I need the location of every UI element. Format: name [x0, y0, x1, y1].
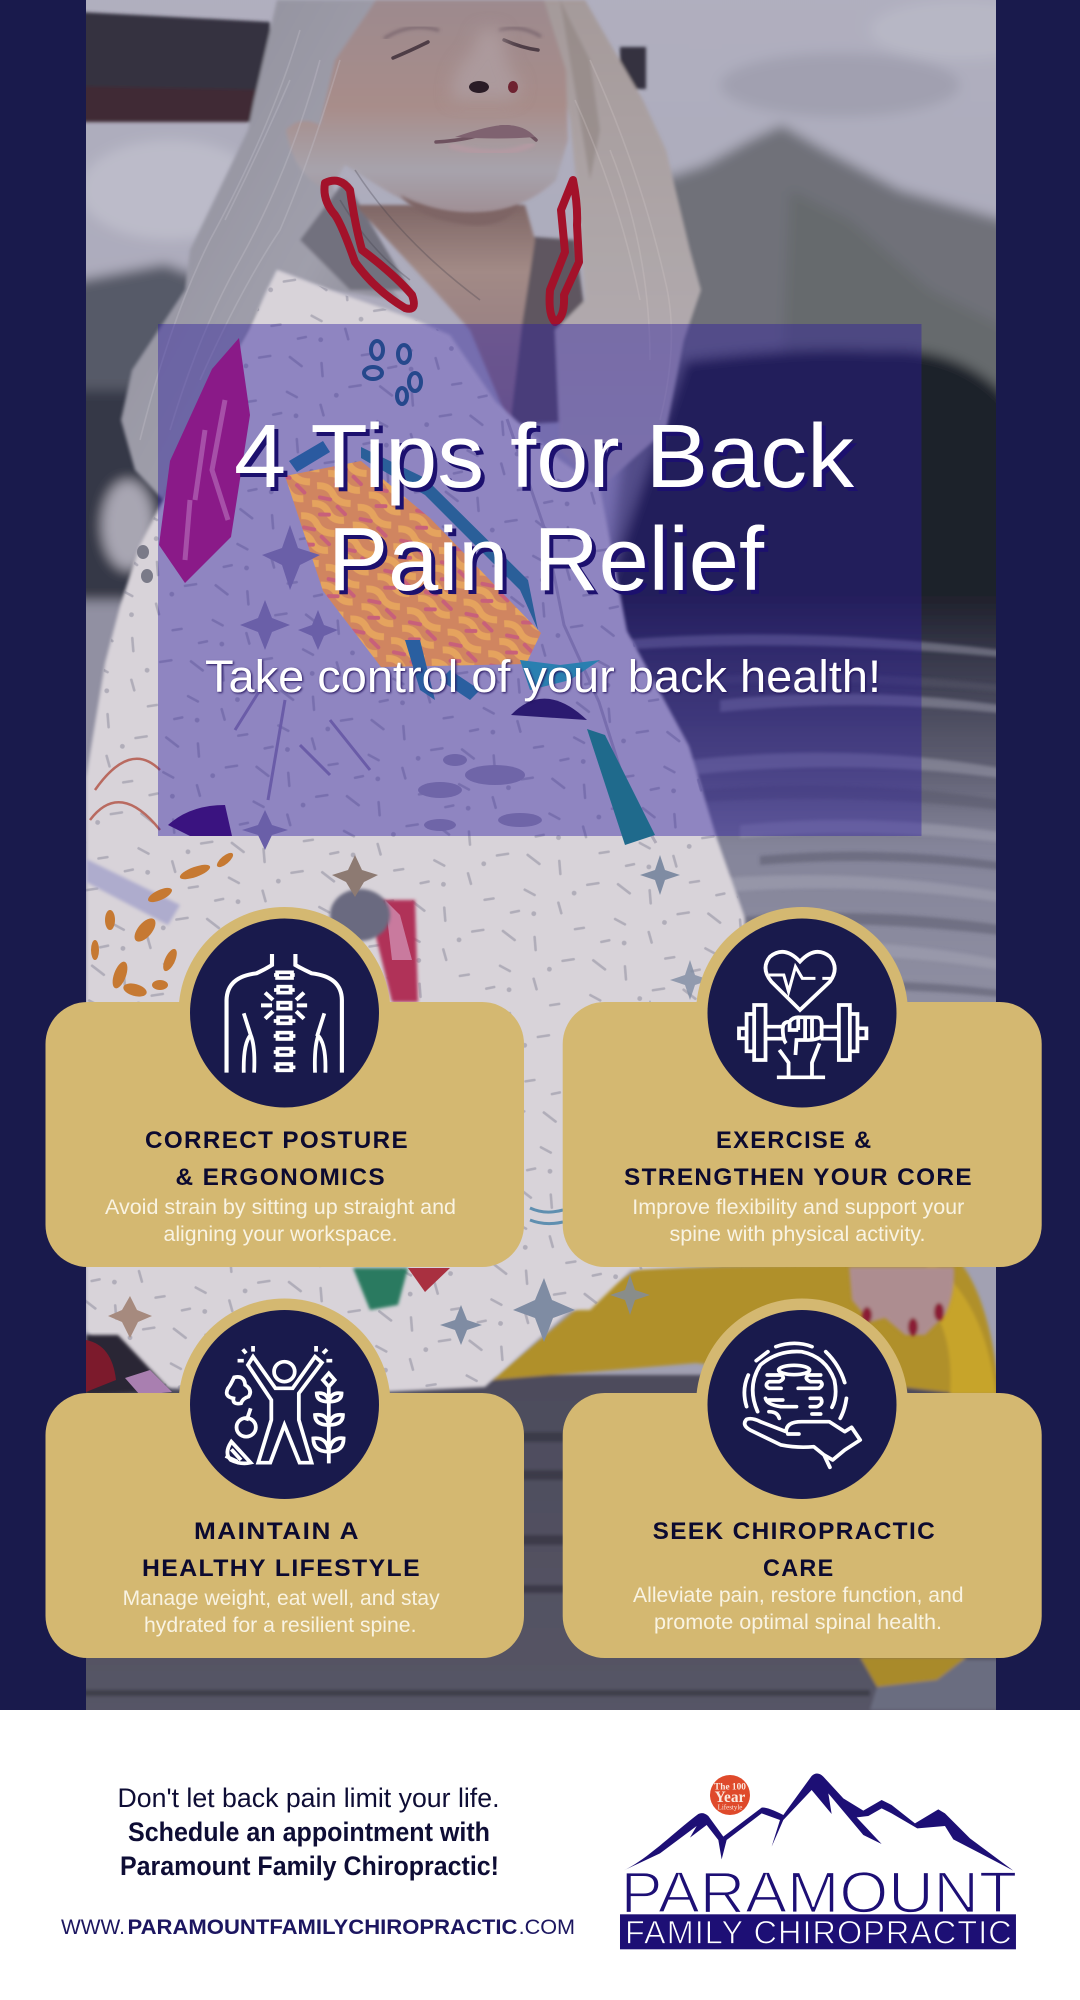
yellow trousers	[491, 1262, 1000, 1395]
bench	[86, 10, 272, 92]
panel: white footer	[0, 1710, 1080, 2000]
photo: woman relaxing on a dock by a lake	[70, 0, 1050, 1730]
title: 4 Tips for Back	[234, 407, 855, 507]
description: Improve flexibility and support your	[632, 1195, 964, 1219]
call to action: Don't let back pain limit your life.	[118, 1783, 500, 1813]
name bar: FAMILY CHIROPRACTIC	[625, 1914, 1012, 1950]
badge: 100 Year Lifestyle	[710, 1775, 750, 1815]
panel: healthy lifestyle card: hydrated for a resilient spine.	[144, 1613, 416, 1637]
panel: healthy lifestyle card	[46, 1298, 524, 1658]
panel: healthy lifestyle card: HEALTHY LIFESTYLE	[142, 1555, 421, 1582]
heading: EXERCISE &	[716, 1127, 872, 1154]
icon: healthy person with food	[226, 1346, 344, 1463]
website: PARAMOUNTFAMILYCHIROPRACTIC	[128, 1915, 518, 1939]
panel: chiropractic care card: CARE	[763, 1555, 834, 1582]
logo: Paramount Family Chiropractic	[620, 1773, 1017, 1950]
robe print accents	[86, 859, 180, 925]
wooden dock	[80, 1375, 1010, 1715]
facial features	[385, 27, 540, 225]
icon: spine and back	[227, 954, 342, 1073]
robe prints seen through the panel	[137, 338, 655, 850]
earrings	[324, 180, 579, 322]
description: Alleviate pain, restore function, and	[633, 1583, 964, 1607]
badge: 100 Year Lifestyle: The 100	[714, 1782, 746, 1792]
panel: correct posture card	[46, 907, 524, 1267]
wordmark: PARAMOUNT	[621, 1862, 1017, 1926]
dark hair behind neck	[510, 235, 585, 425]
call to action: Schedule an appointment with	[128, 1817, 490, 1847]
water	[70, 595, 1020, 1015]
subtitle: Take control of your back health!	[205, 651, 881, 702]
icon: heart and dumbbell	[739, 952, 866, 1077]
heading: CORRECT POSTURE	[145, 1127, 409, 1154]
call to action: Paramount Family Chiropractic!	[120, 1851, 499, 1881]
website: WWW.	[61, 1915, 125, 1939]
description: Avoid strain by sitting up straight and	[105, 1195, 456, 1219]
hand	[849, 1267, 954, 1336]
heading: MAINTAIN A	[194, 1518, 360, 1545]
dark trees	[600, 349, 1010, 605]
panel: translucent purple title box	[137, 324, 922, 850]
title: Pain Relief	[328, 510, 765, 610]
panel: correct posture card: & ERGONOMICS	[176, 1164, 386, 1191]
call to action	[118, 1783, 500, 1881]
left distant hill	[86, 258, 260, 400]
heading: SEEK CHIROPRACTIC	[653, 1518, 936, 1545]
icon: hand holding spine	[744, 1343, 860, 1467]
icon: mountain range	[623, 1773, 1013, 1871]
title	[234, 407, 855, 610]
neck and chest	[355, 205, 535, 425]
badge: 100 Year Lifestyle: Lifestyle	[718, 1803, 742, 1811]
badge: 100 Year Lifestyle: Year	[715, 1789, 745, 1806]
website: .COM	[519, 1915, 575, 1939]
panel: chiropractic care card	[563, 1298, 1042, 1658]
hair, right	[544, 0, 701, 488]
mountain	[610, 120, 996, 575]
panel: exercise card: spine with physical activity.	[670, 1222, 926, 1246]
panel: exercise card	[563, 907, 1042, 1267]
face	[286, 0, 568, 213]
hair strands	[140, 30, 671, 440]
hair, left	[121, 0, 400, 500]
panel: exercise card: STRENGTHEN YOUR CORE	[624, 1164, 973, 1191]
description: Manage weight, eat well, and stay	[123, 1586, 440, 1610]
robe	[86, 270, 745, 1395]
panel: correct posture card: aligning your workspace.	[164, 1222, 398, 1246]
panel: chiropractic care card: promote optimal spinal health.	[654, 1610, 942, 1634]
